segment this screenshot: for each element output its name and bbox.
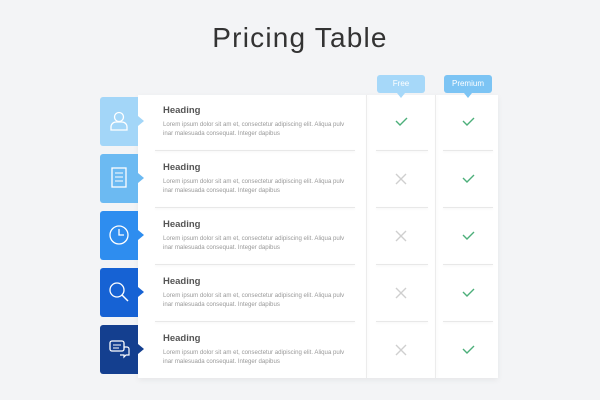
row 3 text: Lorem ipsum dolor sit am et, consectetur adipiscing elit. Aliqua pulv: [163, 235, 344, 242]
row 2 text: Heading: [163, 162, 200, 173]
icon: search: [100, 268, 138, 317]
row 4 text: inar malesuada consequat. Integer dapibus: [163, 300, 280, 308]
row 1 text: inar malesuada consequat. Integer dapibus: [163, 130, 280, 136]
row 4 text: [163, 276, 344, 308]
icon: chat: [100, 325, 138, 374]
title: Pricing Table: [212, 22, 388, 53]
icon: document: [100, 154, 138, 203]
tab: free: Free: [393, 79, 409, 88]
row 1 text: [163, 105, 344, 136]
icon: clock: [100, 211, 138, 260]
row 1 text: Heading: [163, 105, 200, 116]
tab: free: [377, 75, 425, 93]
row 5 text: [163, 333, 344, 364]
row 3 text: inar malesuada consequat. Integer dapibus: [163, 244, 280, 250]
row 4 text: Heading: [163, 276, 200, 287]
panel: table card: [138, 95, 498, 378]
tab: premium: Premium: [452, 79, 484, 88]
marks: free column: [396, 118, 408, 356]
row 5 text: Heading: [163, 333, 200, 344]
row 3 text: Heading: [163, 219, 200, 230]
row 3 text: [163, 219, 344, 250]
icon: user: [100, 97, 138, 146]
row 1 text: Lorem ipsum dolor sit am et, consectetur adipiscing elit. Aliqua pulv: [163, 121, 344, 128]
row 2 text: [163, 162, 344, 194]
tab: premium: [444, 75, 492, 93]
row 5 text: inar malesuada consequat. Integer dapibus: [163, 358, 280, 364]
row 5 text: Lorem ipsum dolor sit am et, consectetur adipiscing elit. Aliqua pulv: [163, 349, 344, 356]
column shadows: [366, 95, 367, 378]
row 2 text: Lorem ipsum dolor sit am et, consectetur adipiscing elit. Aliqua pulv: [163, 178, 344, 185]
row 2 text: inar malesuada consequat. Integer dapibus: [163, 186, 280, 194]
marks: premium column: [462, 118, 474, 354]
row 4 text: Lorem ipsum dolor sit am et, consectetur adipiscing elit. Aliqua pulv: [163, 292, 344, 299]
